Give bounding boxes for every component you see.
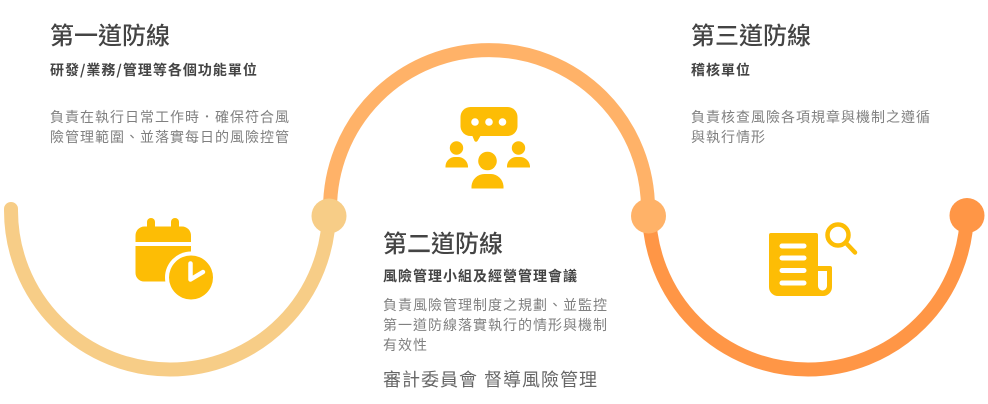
note: audit committee: 審計委員會 督導風險管理 <box>383 370 598 390</box>
subheading: second line units: 風險管理小組及經營管理會議 <box>383 268 578 284</box>
icon: calendar with clock <box>135 218 217 304</box>
description: first line: 險管理範圍、並落實每日的風險控管 <box>50 129 290 145</box>
arc: first line (bottom) <box>11 209 329 369</box>
node: first junction <box>312 198 346 234</box>
heading: second line: 第二道防線 <box>383 231 503 258</box>
description: second line: 第一道防線落實執行的情形與機制 <box>383 317 608 333</box>
description: second line: 有效性 <box>383 337 428 353</box>
text block: second line of defense <box>383 231 608 390</box>
description: second line: 負責風險管理制度之規劃、並監控 <box>383 297 608 313</box>
description: first line: 負責在執行日常工作時．確保符合風 <box>50 109 290 125</box>
heading: third line: 第三道防線 <box>691 23 811 50</box>
description: third line: 與執行情形 <box>691 129 766 145</box>
description: first line <box>50 109 290 145</box>
icon: meeting group with speech bubble <box>446 107 530 188</box>
heading: first line: 第一道防線 <box>50 23 170 50</box>
icon: document with magnifier <box>769 224 855 296</box>
text block: third line of defense <box>691 23 931 145</box>
subheading: third line units: 稽核單位 <box>691 62 751 78</box>
subheading: first line units: 研發/業務/管理等各個功能單位 <box>50 60 258 80</box>
node: second junction <box>631 198 666 234</box>
text block: first line of defense <box>50 23 290 145</box>
arc: second line (top) <box>330 50 648 216</box>
node: third end <box>950 198 984 233</box>
arc: third line (bottom) <box>649 210 967 369</box>
description: third line <box>691 109 931 145</box>
description: second line <box>383 297 608 353</box>
description: third line: 負責核查風險各項規章與機制之遵循 <box>691 109 931 125</box>
